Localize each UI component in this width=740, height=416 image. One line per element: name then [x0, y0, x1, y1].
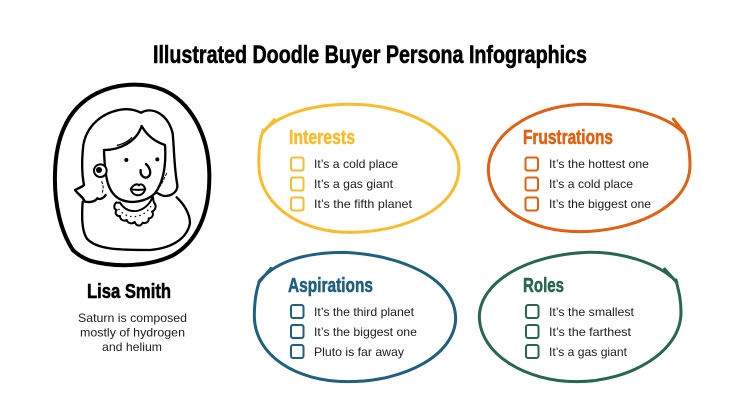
face	[104, 126, 165, 202]
roles list: It’s a gas giant	[549, 345, 628, 359]
panel: aspirations	[254, 252, 456, 382]
panel: interests	[259, 104, 459, 232]
hair strands	[102, 173, 167, 194]
hair lower flip	[85, 195, 106, 202]
frustrations heading: Frustrations	[523, 127, 613, 149]
frustrations list: It’s the hottest one	[549, 157, 649, 171]
description	[78, 311, 187, 354]
nose	[141, 164, 150, 178]
description: and helium	[102, 340, 162, 354]
interests loop	[259, 104, 459, 232]
aspirations list	[314, 305, 417, 359]
ear inner	[96, 167, 102, 173]
interests list: It’s a gas giant	[314, 177, 394, 191]
frustrations checkboxes	[526, 158, 538, 210]
title: Illustrated Doodle Buyer Persona Infographics	[153, 41, 587, 69]
fringe highlight	[117, 138, 132, 145]
roles loop	[479, 252, 681, 382]
eye left	[124, 158, 128, 162]
frustrations list: It’s a cold place	[549, 177, 633, 191]
aspirations list: It’s the third planet	[314, 305, 415, 319]
frustrations list: It’s the biggest one	[549, 197, 651, 211]
aspirations checkboxes	[291, 305, 304, 358]
description: Saturn is composed	[78, 311, 187, 325]
roles list	[549, 305, 635, 359]
roles list: It’s the farthest	[549, 325, 632, 339]
frustrations loop	[488, 104, 690, 232]
roles heading: Roles	[523, 275, 564, 297]
ear	[94, 164, 107, 177]
panel: roles	[479, 252, 681, 382]
frustrations list	[549, 157, 651, 211]
name: Lisa Smith	[87, 281, 171, 303]
collar	[114, 197, 156, 226]
body	[82, 197, 190, 250]
hair	[75, 109, 177, 202]
aspirations list: It’s the biggest one	[314, 325, 417, 339]
portrait: Lisa Smith doodle	[55, 85, 209, 265]
aspirations list: Pluto is far away	[314, 345, 404, 359]
portrait outer loop	[55, 85, 209, 265]
interests heading: Interests	[289, 127, 355, 149]
roles list: It’s the smallest	[549, 305, 635, 319]
interests list	[314, 157, 413, 211]
lips	[131, 184, 145, 195]
interests list: It’s a cold place	[314, 157, 398, 171]
interests list: It’s the fifth planet	[314, 197, 413, 211]
aspirations loop	[254, 252, 456, 382]
description: mostly of hydrogen	[80, 326, 185, 340]
roles checkboxes	[526, 305, 538, 358]
collar dots	[119, 207, 151, 217]
interests checkboxes	[291, 158, 304, 210]
panel: frustrations	[488, 104, 690, 232]
eye right	[155, 157, 159, 161]
aspirations heading: Aspirations	[288, 275, 373, 297]
